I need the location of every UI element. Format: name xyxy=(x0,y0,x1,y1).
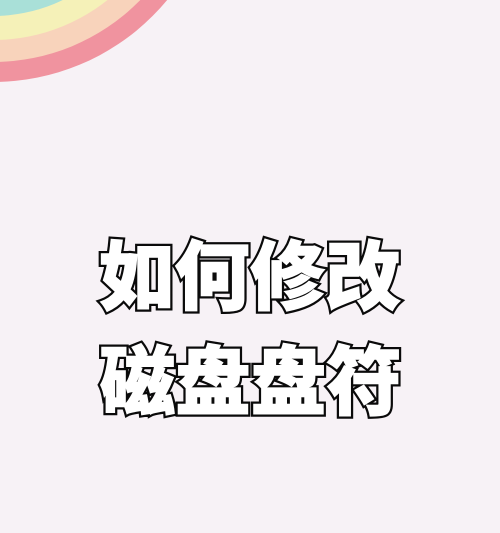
icon: rainbow arc in top-left corner xyxy=(0,0,219,82)
title: line 2: 磁盘盘符 xyxy=(100,340,402,424)
title: line 1: 如何修改 xyxy=(99,236,401,320)
title: line 1: 如何修改 xyxy=(99,236,401,320)
title: line 2: 磁盘盘符 xyxy=(100,340,402,424)
